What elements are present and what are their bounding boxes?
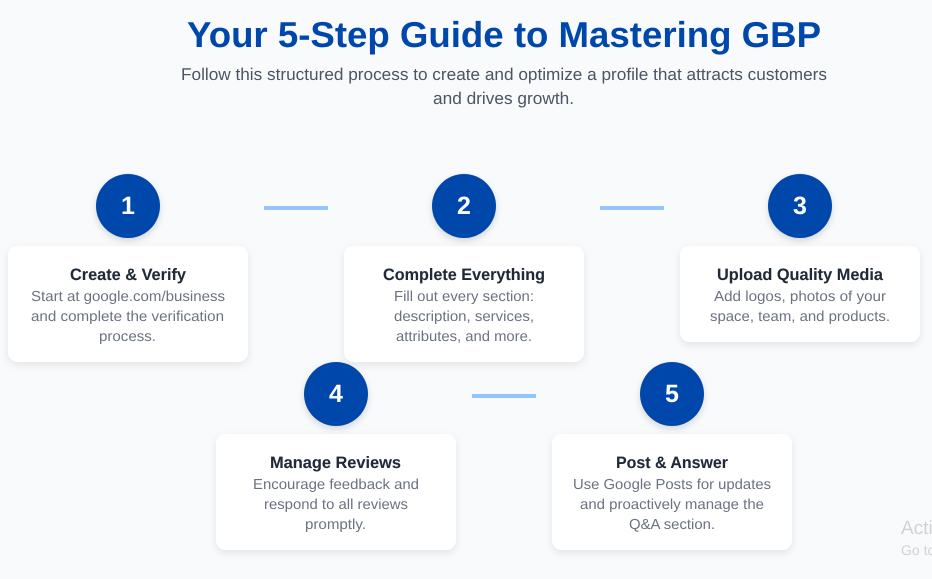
step 4: manage reviews [216, 362, 456, 550]
step 3 description [710, 289, 890, 325]
connector: step 1 to 2 [264, 206, 328, 210]
step 1 number badge: 1 [121, 192, 135, 220]
title: Your 5-Step Guide to Mastering GBP [187, 14, 821, 55]
step 1 description: and complete the verification [31, 309, 224, 325]
step 4 description: respond to all reviews [264, 497, 408, 513]
step 1 description: Start at google.com/business [31, 289, 225, 305]
step 4 description: promptly. [305, 517, 366, 533]
watermark: activate windows [901, 518, 932, 558]
step 2 description: description, services, [394, 309, 534, 325]
step 3 number badge: 3 [793, 192, 807, 220]
step 5 number badge: 5 [665, 380, 679, 408]
step 2 heading: Complete Everything [383, 266, 545, 284]
step 2 number badge [432, 174, 496, 238]
step 5 description: Q&A section. [629, 517, 715, 533]
step 5: post and answer [552, 362, 792, 550]
step 1 heading: Create & Verify [70, 266, 187, 284]
step 2 card [344, 246, 584, 362]
connector: step 4 to 5 [472, 394, 536, 398]
step 1 description: process. [99, 329, 156, 345]
step 1 description [31, 289, 225, 345]
step 2 number badge: 2 [457, 192, 471, 220]
step 5 description: Use Google Posts for updates [573, 477, 771, 493]
step 2 description: attributes, and more. [396, 329, 532, 345]
step 4 number badge: 4 [329, 380, 343, 408]
step 4 card [216, 434, 456, 550]
step 4 description: Encourage feedback and [253, 477, 419, 493]
step 4 number badge [304, 362, 368, 426]
step 1 card [8, 246, 248, 362]
step 5 card [552, 434, 792, 550]
step 1 number badge [96, 174, 160, 238]
step 5 number badge [640, 362, 704, 426]
step 2 description: Fill out every section: [394, 289, 534, 305]
step 3 heading: Upload Quality Media [717, 266, 884, 284]
step 5 heading: Post & Answer [616, 454, 729, 472]
step 2 description [394, 289, 534, 345]
step 3 description: Add logos, photos of your [714, 289, 886, 305]
subtitle [181, 65, 827, 108]
step 3: upload quality media [680, 174, 920, 342]
step 5 description: and proactively manage the [580, 497, 764, 513]
step 1: create and verify [8, 174, 248, 362]
step 4 description [253, 477, 419, 533]
step 4 heading: Manage Reviews [270, 454, 401, 472]
step 5 description [573, 477, 771, 533]
step 3 description: space, team, and products. [710, 309, 890, 325]
subtitle: Follow this structured process to create and optimize a profile that attracts customers [181, 65, 827, 84]
step 3 card [680, 246, 920, 342]
connector: step 2 to 3 [600, 206, 664, 210]
step 3 number badge [768, 174, 832, 238]
subtitle: and drives growth. [433, 89, 574, 108]
step 2: complete everything [344, 174, 584, 362]
